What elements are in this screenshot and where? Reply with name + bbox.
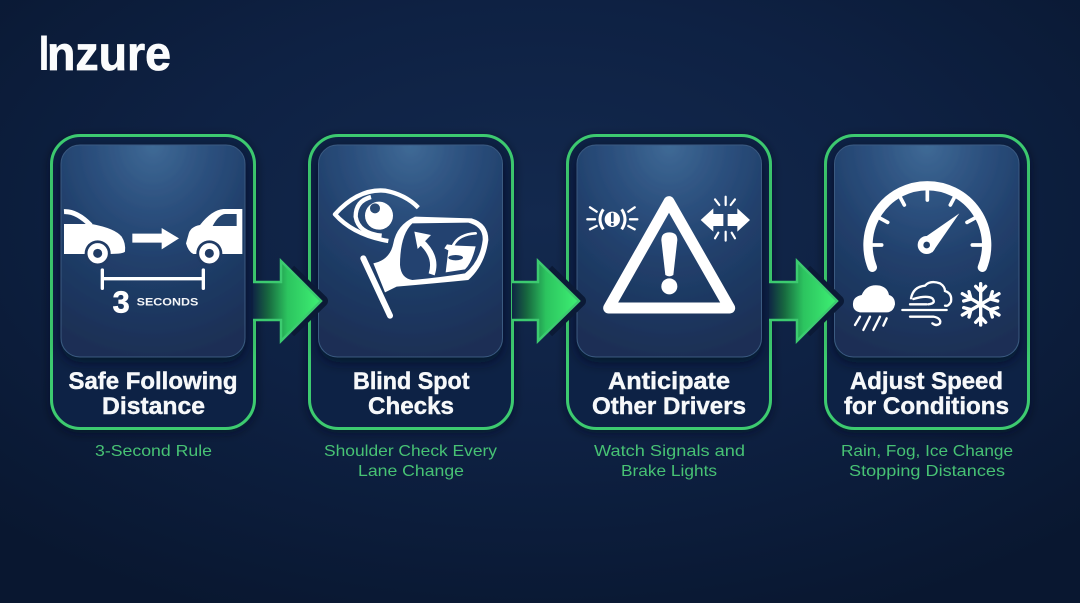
panel: adjust speed for conditions [826, 136, 1028, 428]
icon: speedometer [868, 186, 987, 267]
heading [353, 368, 470, 420]
heading: Blind Spot [353, 368, 470, 395]
arrow: step 3 to 4 [769, 261, 838, 341]
caption: shoulder check: Lane Change [358, 463, 464, 480]
heading: Anticipate [608, 368, 730, 395]
heading: Safe Following [68, 368, 238, 395]
arrow: step 2 to 3 [512, 261, 580, 341]
heading: Checks [368, 393, 454, 420]
caption: watch signals: Watch Signals and [594, 443, 745, 460]
caption: shoulder check [324, 443, 497, 480]
heading: for Conditions [844, 393, 1009, 420]
icon panel [577, 145, 762, 357]
caption: 3-second rule: 3-Second Rule [95, 443, 212, 460]
card outline [568, 136, 770, 428]
icon panel [61, 145, 245, 357]
heading: Adjust Speed [850, 368, 1003, 395]
card outline [52, 136, 254, 428]
heading: Distance [102, 393, 205, 420]
panel: anticipate other drivers [568, 136, 770, 428]
heading [844, 368, 1009, 420]
caption: watch signals: Brake Lights [621, 463, 717, 480]
icon panel [318, 145, 502, 357]
icon: brake light and indicators [587, 197, 750, 241]
icon: eye and side mirror [335, 190, 488, 316]
icon: rain, fog and snow [853, 282, 999, 330]
caption: watch signals [594, 443, 745, 480]
panel: blind spot checks [310, 136, 512, 428]
icon: cars with 3 seconds gap [64, 209, 242, 320]
arrow: step 1 to 2 [253, 261, 322, 341]
logo: Inzure: I [38, 25, 50, 81]
caption: shoulder check: Shoulder Check Every [324, 443, 497, 460]
heading: Other Drivers [592, 393, 746, 420]
caption: rain fog ice [841, 443, 1013, 480]
icon panel [834, 145, 1019, 357]
heading [68, 368, 238, 420]
panel: safe following distance [52, 136, 254, 428]
logo: Inzure: nzure [47, 28, 171, 81]
icon: warning triangle [609, 202, 730, 308]
icon: cars with 3 seconds gap: 3 [113, 286, 130, 320]
heading [592, 368, 746, 420]
caption: rain fog ice: Rain, Fog, Ice Change [841, 443, 1013, 460]
card outline [310, 136, 512, 428]
caption: rain fog ice: Stopping Distances [849, 463, 1005, 480]
card outline [826, 136, 1028, 428]
icon: cars with 3 seconds gap: SECONDS [137, 297, 199, 309]
